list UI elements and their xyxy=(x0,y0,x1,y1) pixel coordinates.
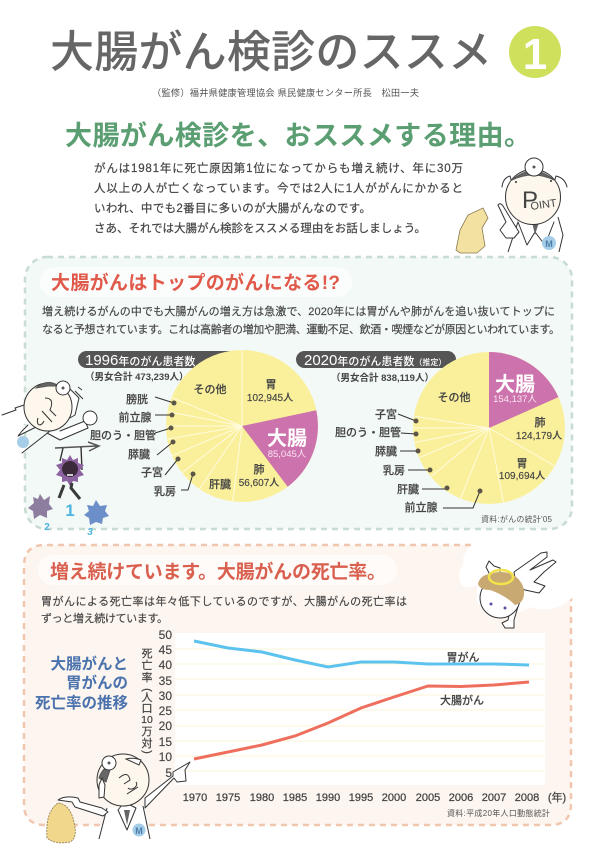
panel heading xyxy=(40,267,352,297)
pie chart 2020: 胃 xyxy=(516,457,528,470)
virus 3: 3 xyxy=(87,527,93,538)
stomach cancer line xyxy=(194,641,529,667)
y axis title: 死 xyxy=(142,648,152,660)
y axis title: 亡 xyxy=(142,658,152,672)
pie source: 資料:がんの統計'05 xyxy=(481,514,553,524)
panel: rising cancer xyxy=(25,257,572,529)
intro text: いわれ、中でも2番目に多いのが大腸がんなのです。 xyxy=(94,201,371,215)
doctor with POINT: P xyxy=(522,187,538,214)
y axis title: 率 xyxy=(142,671,152,684)
panel: mortality rate xyxy=(24,545,571,825)
pie chart 1996 xyxy=(90,350,318,502)
line chart xyxy=(159,628,566,804)
line chart: 2000 xyxy=(382,792,406,804)
pie chart 2020: 154,137人 xyxy=(493,394,537,405)
colorectal cancer line xyxy=(194,682,529,759)
pie chart 2020: 大腸 xyxy=(495,373,535,396)
panel text xyxy=(41,594,407,625)
panel text: ずっと増え続けています。 xyxy=(41,611,168,625)
panel heading: 増え続けています。大腸がんの死亡率。 xyxy=(50,560,386,583)
virus 2 xyxy=(28,494,53,533)
number 1: 1 xyxy=(65,501,75,520)
1996 chart title: （男女合計 473,239人） xyxy=(85,371,188,383)
doctor with POINT: M xyxy=(545,239,553,249)
doctor with POINT: OINT xyxy=(530,197,558,213)
intro text: がんは1981年に死亡原因第1位になってからも増え続け、年に30万 xyxy=(94,161,463,175)
panel heading: 大腸がんはトップのがんになる!? xyxy=(51,271,340,294)
intro text: さあ、それでは大腸がん検診をススメる理由をお話しましょう。 xyxy=(94,221,426,235)
side title: 胃がんの xyxy=(66,673,128,692)
virus 3 xyxy=(84,500,109,538)
y axis title: 対 xyxy=(142,737,152,750)
line chart: 45 xyxy=(159,643,172,657)
hedgehog xyxy=(47,803,75,843)
pie chart 1996: 乳房 xyxy=(154,485,176,498)
y axis title xyxy=(141,648,153,754)
pie chart 2020: 109,694人 xyxy=(499,471,545,482)
line chart: 1975 xyxy=(216,792,240,804)
pie chart 2020: 前立腺 xyxy=(404,500,438,514)
issue number badge: 1 xyxy=(523,30,547,79)
colorectal cancer label: 大腸がん xyxy=(440,693,484,707)
line chart: 2007 xyxy=(482,792,506,804)
y axis title: 口 xyxy=(142,703,152,715)
pie chart 1996: 子宮 xyxy=(141,465,163,479)
line chart: 20 xyxy=(159,719,172,733)
panel text: 胃がんによる死亡率は年々低下しているのですが、大腸がんの死亡率は xyxy=(41,594,407,608)
2020 chart title: 2020年のがん患者数（推定） xyxy=(304,352,446,369)
line chart: 1985 xyxy=(283,792,307,804)
pie chart 2020: 肝臓 xyxy=(397,483,419,496)
intro text xyxy=(94,161,463,235)
bottom doctor pointing xyxy=(58,754,190,839)
line chart: 30 xyxy=(159,689,172,703)
line chart: 50 xyxy=(159,628,172,642)
chart source: 資料:平成20年人口動態統計 xyxy=(447,808,550,818)
arrow and virus xyxy=(55,442,99,499)
1996 chart title xyxy=(78,351,238,383)
pie chart 1996: 前立腺 xyxy=(118,410,152,424)
pie chart 1996: 85,045人 xyxy=(268,449,307,460)
y axis title: ( xyxy=(141,688,153,692)
pie chart 2020: 肺 xyxy=(534,416,546,429)
line chart: 10 xyxy=(159,750,172,764)
line chart: 1970 xyxy=(183,792,207,804)
hamster xyxy=(456,208,488,253)
pie chart 2020: その他 xyxy=(438,391,470,404)
pie chart 1996: 胆のう・胆管 xyxy=(90,428,156,442)
title: 大腸がん検診のススメ xyxy=(50,28,492,77)
2020 chart title xyxy=(296,351,456,384)
pie chart 2020 xyxy=(335,352,565,514)
1996 chart title: 1996年のがん患者数 xyxy=(85,352,195,369)
line chart: 1995 xyxy=(349,792,373,804)
2020 chart title: （男女合計 838,119人） xyxy=(331,372,434,384)
doctor with POINT xyxy=(498,158,567,252)
side title xyxy=(35,654,128,712)
pie chart 2020: 膵臓 xyxy=(375,444,397,458)
line chart: 1990 xyxy=(316,792,340,804)
panel text: 増え続けるがんの中でも大腸がんの増え方は急激で、2020年には胃がんや肺がんを追い抜いてトップに xyxy=(42,304,555,318)
side title: 死亡率の推移 xyxy=(35,694,128,712)
line chart: 40 xyxy=(159,658,172,672)
y axis title: 人 xyxy=(142,692,152,704)
bottom doctor pointing: M xyxy=(135,826,143,836)
supervisor credit: （監修）福井県健康管理協会 県民健康センター所長 松田一夫 xyxy=(152,87,419,98)
angel with cloud xyxy=(459,544,572,628)
pie chart 2020: 124,179人 xyxy=(516,431,562,442)
pie chart 2020: 胆のう・胆管 xyxy=(335,425,401,439)
pie chart 1996: 膵臓 xyxy=(128,447,150,461)
pie chart 1996: 膀胱 xyxy=(126,392,148,406)
line chart: 2008 xyxy=(515,792,539,804)
pie chart 2020: 乳房 xyxy=(383,464,405,477)
intro text: 人以上の人が亡くなっています。今では2人に1人ががんにかかると xyxy=(94,181,463,195)
virus 2: 2 xyxy=(44,522,50,533)
y axis title: 10 xyxy=(141,714,153,726)
pie chart 1996: 胃 xyxy=(266,378,276,391)
y axis title: ) xyxy=(141,750,153,754)
pie chart 1996: 大腸 xyxy=(267,427,307,450)
panel heading xyxy=(38,555,397,585)
stomach cancer label: 胃がん xyxy=(446,650,480,664)
pie chart 1996: その他 xyxy=(194,383,226,396)
section heading: 大腸がん検診を、おススメする理由。 xyxy=(65,120,531,151)
panel text xyxy=(42,304,560,336)
line chart: 35 xyxy=(159,674,172,688)
pie chart 1996: 102,945人 xyxy=(247,393,293,404)
pie chart 1996: 肝臓 xyxy=(209,478,231,491)
pie chart 2020: 子宮 xyxy=(375,407,397,421)
side title: 大腸がんと xyxy=(50,654,128,673)
line chart: 5 xyxy=(165,766,172,780)
line chart: 1980 xyxy=(250,792,274,804)
pie chart 1996: 56,607人 xyxy=(239,478,279,489)
flying doctor xyxy=(2,381,97,453)
line chart: (年) xyxy=(548,790,566,804)
y axis title: 万 xyxy=(142,726,152,738)
line chart: 15 xyxy=(159,735,172,749)
pie chart 1996: 肺 xyxy=(254,463,264,476)
panel text: なると予想されています。これは高齢者の増加や肥満、運動不足、飲酒・喫煙などが原因といわれています。 xyxy=(42,322,560,336)
line chart: 25 xyxy=(159,704,172,718)
line chart: 2005 xyxy=(416,792,440,804)
issue number badge xyxy=(509,26,561,79)
line chart: 2006 xyxy=(449,792,473,804)
